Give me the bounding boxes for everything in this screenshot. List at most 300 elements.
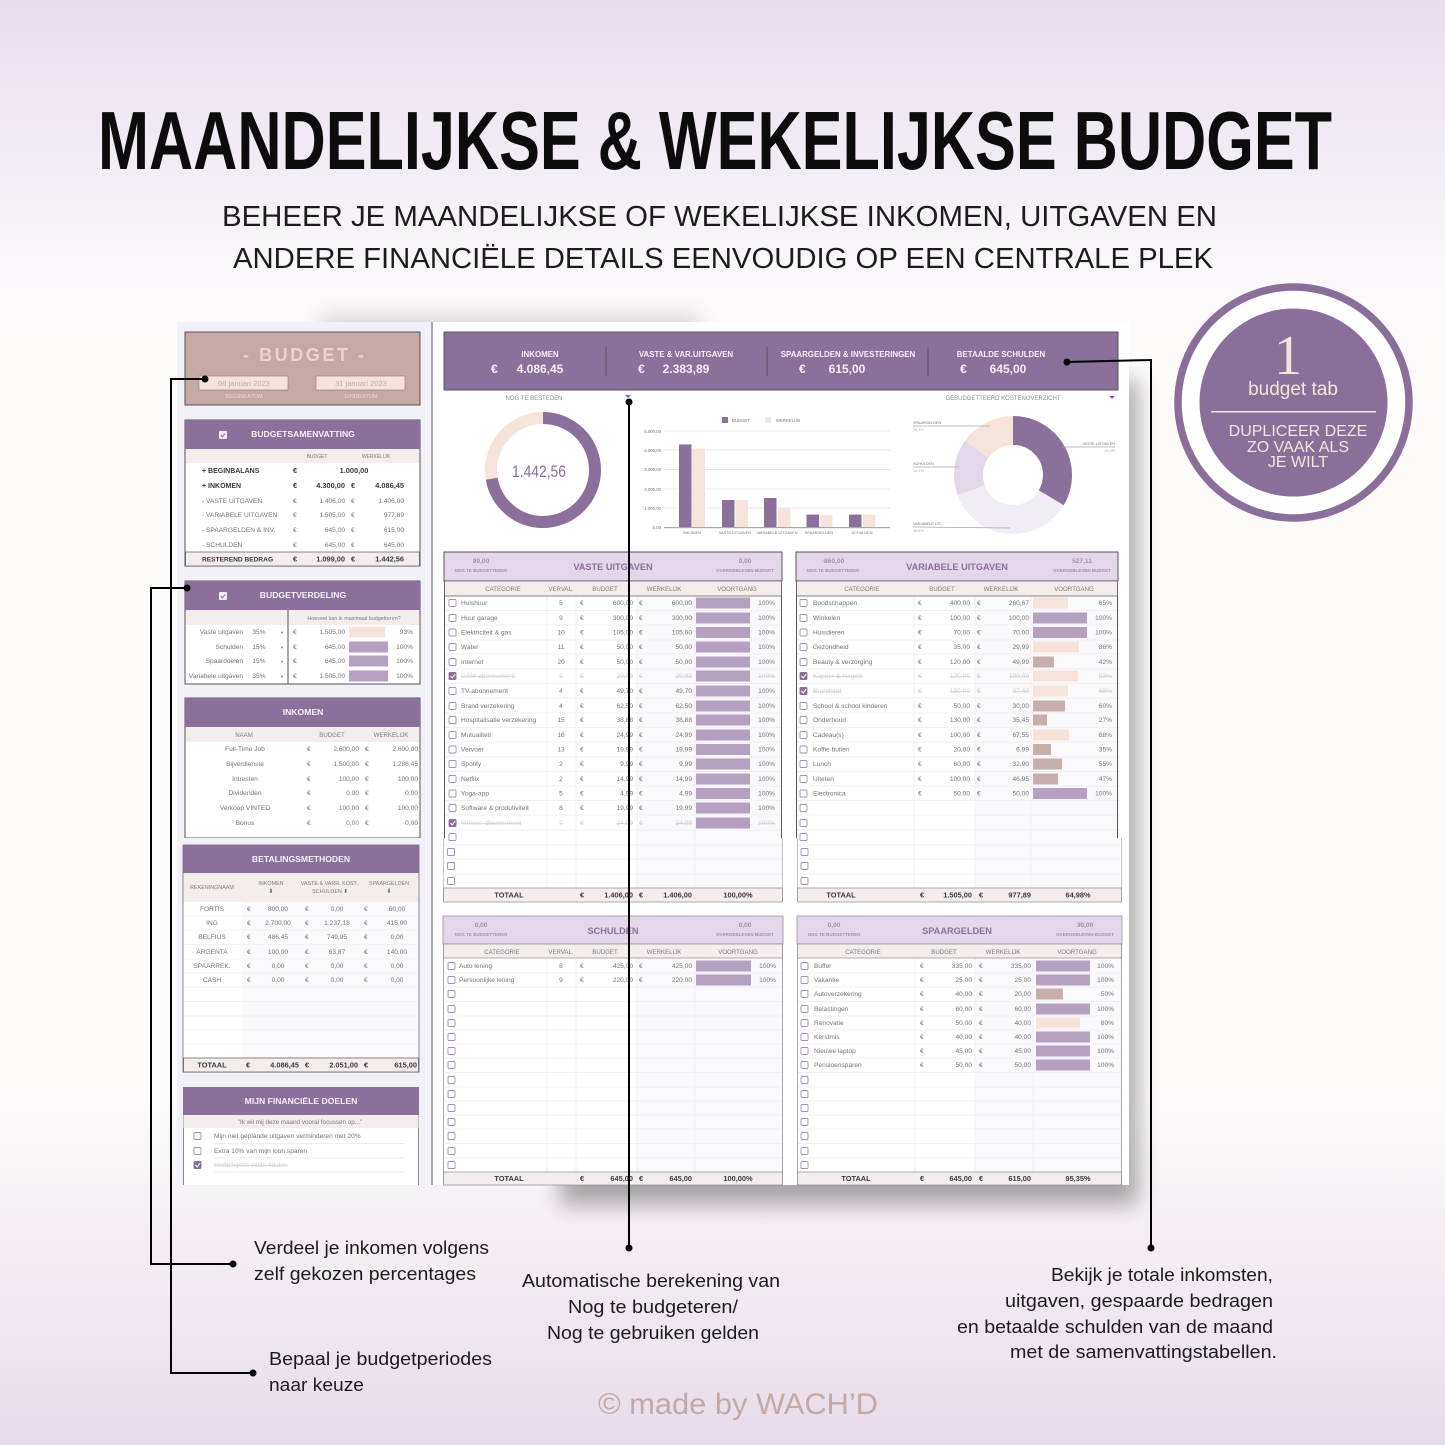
allocation rows: 35%: [252, 673, 266, 680]
savings rows: 100%: [1097, 1048, 1114, 1055]
fixed expenses rows: GSM-abonnement: [461, 673, 515, 680]
payment methods rows: €: [247, 977, 251, 984]
fixed expenses rows: 14,99: [616, 776, 633, 783]
payment methods rows: 60,00: [389, 906, 406, 913]
callout: automatic calculation text: Nog te budgeteren/: [568, 1296, 739, 1317]
variable expenses rows: 97,40: [1012, 688, 1029, 695]
fixed expenses rows: 100%: [758, 820, 775, 827]
payment methods rows: 63,87: [329, 949, 346, 956]
fixed expenses rows: 100%: [758, 630, 775, 636]
savings header: OVERGEBLEVEN BUDGET: [1056, 932, 1114, 937]
fixed expenses rows: 50,00: [616, 644, 633, 651]
summary rows: €: [351, 481, 355, 490]
allocation rows: ▼: [280, 674, 284, 679]
variable expenses rows: €: [918, 761, 922, 768]
variable expenses total row: 64,98%: [1065, 890, 1091, 900]
fixed expenses rows: 600,00: [672, 600, 692, 607]
fixed expenses rows: €: [580, 600, 584, 607]
variable expenses rows: €: [977, 776, 981, 783]
income rows: Dividenden: [228, 790, 262, 797]
debts header: 0,00: [475, 922, 488, 929]
fixed expenses rows: €: [580, 746, 584, 754]
fixed expenses rows: €: [639, 820, 643, 827]
savings total row: 645,00: [949, 1174, 972, 1183]
income rows: 100,00: [339, 776, 359, 783]
income rows: 100,00: [398, 805, 418, 812]
summary total row: €: [293, 554, 297, 564]
allocation rows: Variabele uitgaven: [189, 673, 243, 680]
savings rows: Autoverzekering: [814, 991, 862, 998]
payment methods rows: 0,00: [272, 977, 285, 984]
summary rows: €: [293, 481, 297, 490]
fixed expenses rows: €: [639, 717, 643, 724]
savings rows: 335,00: [1011, 963, 1031, 970]
income rows: €: [365, 820, 369, 827]
allocation rows: ▼: [280, 645, 284, 650]
variable expenses header: NOG TE BUDGETTEREN: [807, 568, 859, 573]
panel: budget allocation: [185, 581, 420, 684]
debts header: NOG TE BUDGETTEREN: [455, 932, 507, 937]
fixed expenses rows: Huur garage: [461, 615, 498, 622]
fixed expenses rows: 49,70: [675, 688, 692, 695]
debts rows: Persoonlijke lening: [459, 977, 515, 984]
variable expenses rows: 55%: [1099, 761, 1112, 768]
summary header: BUDGETSAMENVATTING: [251, 429, 355, 439]
fixed expenses header: NOG TE BUDGETTEREN: [455, 568, 507, 573]
subtitle: ANDERE FINANCIËLE DETAILS EENVOUDIG OP EEN CENTRALE PLEK: [233, 243, 1214, 275]
variable expenses rows: €: [977, 746, 981, 754]
payment methods total row: €: [246, 1060, 250, 1070]
y axis labels: 1.000,00: [644, 506, 662, 511]
fixed expenses rows: 38,88: [675, 717, 692, 724]
savings column headings: CATEGORIE: [845, 949, 881, 956]
fixed expenses rows: 600,00: [613, 600, 633, 607]
variable expenses rows: School & school kinderen: [813, 703, 888, 710]
payment methods rows: 0,00: [272, 963, 285, 970]
income rows: €: [307, 746, 311, 753]
variable expenses rows: €: [918, 659, 922, 666]
payment methods rows: €: [364, 963, 368, 970]
payment methods column headings: [184, 873, 418, 902]
fixed expenses rows: 100%: [758, 673, 775, 680]
savings rows: €: [920, 1062, 924, 1069]
spreadsheet screenshot: [177, 322, 1129, 1185]
callout: totals text: met de samenvattingstabellen.: [1010, 1341, 1277, 1362]
savings rows: €: [979, 1020, 983, 1027]
chart legend: [722, 417, 800, 423]
debts rows: 220,00: [672, 977, 692, 984]
savings total row: 615,00: [1008, 1174, 1031, 1183]
variable expenses total row: TOTAAL: [826, 890, 856, 900]
arrow: totals callout line: [1064, 358, 1154, 1252]
income rows: 0,00: [346, 820, 359, 827]
fixed expenses rows: €: [580, 790, 584, 798]
variable expenses rows: 100,00: [950, 615, 970, 622]
savings rows: Vakantie: [814, 977, 840, 984]
variable expenses rows: €: [918, 688, 922, 695]
debts rows: 220,00: [613, 977, 633, 984]
savings rows: 100%: [1097, 963, 1114, 970]
variable expenses rows: Onderhoud: [813, 717, 846, 724]
start date field: [199, 376, 288, 400]
savings rows: [801, 960, 1114, 1168]
fixed expenses rows: 4,99: [620, 790, 633, 798]
payment methods column headings: ⬇: [386, 888, 392, 895]
panel: payment methods: [183, 845, 419, 1072]
income rows: Verkoop VINTED: [220, 805, 270, 812]
allocation rows: €: [293, 658, 297, 665]
allocation header: BUDGETVERDELING: [260, 590, 347, 600]
y axis labels: 2.000,00: [644, 487, 662, 492]
income header: [185, 698, 420, 727]
fixed expenses rows: Brand verzekering: [461, 703, 515, 710]
fixed expenses rows: Yoga-app: [461, 790, 489, 798]
start date field: 06 januari 2023: [218, 379, 270, 388]
payment methods rows: €: [247, 920, 251, 927]
payment methods rows: €: [364, 977, 368, 984]
goals list: [194, 1132, 361, 1169]
savings column headings: [798, 944, 1122, 958]
fixed expenses header: [444, 552, 782, 581]
fixed expenses rows: 100%: [758, 659, 775, 666]
fixed expenses rows: 100%: [758, 600, 775, 607]
fixed expenses rows: 50,00: [675, 659, 692, 666]
savings rows: 45,00: [955, 1048, 972, 1055]
fixed expenses total row: TOTAAL: [494, 890, 524, 900]
debts rows: 8: [559, 963, 563, 970]
fixed expenses rows: 29,99: [616, 673, 633, 680]
fixed expenses rows: 300,00: [672, 615, 692, 622]
total: income: INKOMEN: [521, 350, 559, 359]
goals prompt: [184, 1115, 418, 1128]
variable expenses rows: Kapper & Nagels: [813, 673, 864, 680]
savings rows: 25,00: [1014, 977, 1031, 984]
variable expenses rows: 50,00: [1012, 790, 1029, 798]
fixed expenses rows: Hospitalisatie verzekering: [461, 717, 536, 724]
debts rows: €: [639, 977, 643, 984]
badge: one budget tab: ZO VAAK ALS: [1247, 439, 1349, 456]
fixed expenses rows: 2: [559, 761, 563, 768]
fixed expenses rows: €: [580, 673, 584, 680]
panel: savings table: [797, 916, 1122, 1185]
payment methods header: [183, 845, 419, 873]
savings column headings: WERKELIJK: [986, 949, 1020, 956]
debts rows: [448, 960, 776, 1168]
income rows: €: [307, 790, 311, 797]
goals prompt: "Ik wil mij deze maand vooral focussen op...": [238, 1119, 362, 1126]
debts column headings: VOORTGANG: [718, 949, 758, 956]
fixed expenses rows: 24,99: [616, 820, 633, 827]
fixed expenses rows: 100%: [758, 615, 775, 622]
variable expenses total row: [798, 888, 1122, 902]
fixed expenses rows: 100%: [758, 776, 775, 783]
variable expenses rows: 400,00: [950, 600, 970, 607]
x axis labels: SPAARGELDEN: [805, 531, 833, 535]
fixed expenses rows: Huishuur: [461, 600, 488, 607]
savings rows: Belastingen: [814, 1006, 849, 1013]
summary rows: €: [293, 512, 297, 519]
summary rows: - VASTE UITGAVEN: [202, 498, 262, 505]
x axis labels: VASTE UITGAVEN: [719, 531, 751, 535]
variable expenses rows: 6,99: [1016, 746, 1029, 754]
savings rows: 40,00: [955, 991, 972, 998]
fixed expenses column headings: VOORTGANG: [717, 586, 757, 593]
panel: fixed expenses table: [444, 552, 782, 902]
fixed expenses total row: [444, 888, 782, 902]
savings total row: 95,35%: [1065, 1174, 1091, 1183]
x axis labels: VARIABELE UITGAVEN: [756, 531, 798, 535]
debts rows: €: [580, 977, 584, 984]
callout: totals text: en betaalde schulden van de maand: [957, 1316, 1273, 1337]
fixed expenses rows: €: [639, 600, 643, 607]
panel: debts table: [443, 916, 783, 1185]
payment methods rows: 486,45: [268, 934, 288, 941]
payment methods rows: €: [305, 934, 309, 941]
variable expenses rows: €: [918, 615, 922, 622]
arrow: allocation callout line: [151, 584, 236, 1268]
fixed expenses rows: Software & produtiviteit: [461, 805, 529, 812]
variable expenses header: OVERGEBLEVEN BUDGET: [1053, 568, 1111, 573]
fixed expenses rows: €: [639, 630, 643, 636]
summary rows: 615,00: [384, 527, 404, 534]
allocation rows: 15%: [252, 658, 266, 665]
fixed expenses rows: 19,99: [616, 746, 633, 754]
savings rows: 60,00: [955, 1006, 972, 1013]
variable expenses rows: €: [918, 630, 922, 636]
debts column headings: VERVAL.: [548, 949, 574, 956]
variable expenses column headings: CATEGORIE: [844, 586, 880, 593]
fixed expenses rows: €: [639, 703, 643, 710]
payment methods rows: 1.237,18: [324, 920, 350, 927]
variable expenses rows: €: [977, 732, 981, 739]
debts header: [443, 916, 783, 944]
allocation rows: Vaste uitgaven: [200, 629, 243, 636]
credit: © made by WACH’D: [598, 1388, 878, 1421]
fixed expenses rows: €: [580, 717, 584, 724]
fixed expenses rows: 9: [559, 615, 563, 622]
payment methods rows: CASH: [203, 977, 221, 984]
total: fixed and variable expenses: VASTE & VAR.UITGAVEN: [639, 350, 733, 359]
fixed expenses total row: €: [580, 890, 584, 900]
payment methods rows: 415,00: [387, 920, 407, 927]
payment methods column headings: SCHULDEN ⬇: [312, 889, 348, 895]
fixed expenses rows: Internet: [461, 659, 484, 666]
variable expenses column headings: [796, 581, 1118, 596]
fixed expenses rows: €: [580, 703, 584, 710]
summary rows: 977,89: [384, 512, 404, 519]
fixed expenses rows: €: [580, 732, 584, 739]
variable expenses rows: 150,00: [950, 688, 970, 695]
income rows: €: [365, 761, 369, 768]
savings rows: 50,00: [1014, 1062, 1031, 1069]
savings header: 30,00: [1077, 922, 1094, 929]
variable expenses rows: Koffie buiten: [813, 746, 850, 754]
income rows: Bonus: [236, 820, 255, 827]
variable expenses rows: 65%: [1099, 600, 1112, 607]
savings rows: 100%: [1097, 1034, 1114, 1041]
fixed expenses column headings: WERKELIJK: [647, 586, 681, 593]
savings rows: Kerstmis: [814, 1034, 840, 1041]
payment methods rows: €: [305, 920, 309, 927]
y axis labels: 5.000,00: [644, 429, 662, 434]
allocation rows: 1.505,00: [319, 629, 345, 636]
variable expenses rows: 100,00: [950, 776, 970, 783]
payment methods column headings: REKENINGNAAM: [190, 885, 234, 891]
variable expenses rows: 46,95: [1012, 776, 1029, 783]
fixed expenses rows: 50,00: [616, 659, 633, 666]
debts rows: Auto lening: [459, 963, 492, 970]
callout: totals text: [957, 1264, 1277, 1362]
fixed expenses rows: 300,00: [613, 615, 633, 622]
fixed expenses rows: 3: [559, 673, 563, 680]
savings rows: Renovatie: [814, 1020, 844, 1027]
debts rows: 100%: [759, 963, 776, 970]
total: debts paid: [957, 350, 1046, 376]
savings header: SPAARGELDEN: [922, 926, 992, 936]
variable expenses rows: 100%: [1095, 630, 1112, 636]
panel: budget period: [185, 332, 420, 405]
payment methods rows: €: [247, 934, 251, 941]
fixed expenses rows: 100%: [758, 732, 775, 739]
variable expenses rows: €: [977, 630, 981, 636]
variable expenses rows: [800, 598, 1112, 884]
fixed expenses total row: 1.406,00: [604, 890, 633, 900]
donut chart: remaining to spend: 1.442,56: [512, 462, 566, 481]
savings rows: 100%: [1097, 977, 1114, 984]
pie labels: 15,4%: [913, 469, 924, 473]
savings rows: 45,00: [1014, 1048, 1031, 1055]
debts total row: €: [639, 1174, 643, 1183]
fixed expenses rows: 7: [559, 820, 563, 827]
variable expenses rows: 42%: [1099, 659, 1112, 666]
arrow: budget period callout line: [171, 376, 256, 1376]
debts total row: €: [580, 1174, 584, 1183]
variable expenses rows: 35,00: [953, 644, 970, 651]
allocation rows: 100%: [396, 673, 413, 680]
fixed expenses rows: €: [639, 644, 643, 651]
savings rows: 40,00: [1014, 1020, 1031, 1027]
summary column headings: [186, 449, 420, 463]
debts rows: 9: [559, 977, 563, 984]
income rows: 0,00: [405, 790, 418, 797]
panel: financial goals: [183, 1087, 419, 1185]
variable expenses rows: 67,55: [1012, 732, 1029, 739]
payment methods rows: €: [247, 963, 251, 970]
variable expenses rows: €: [977, 644, 981, 651]
variable expenses rows: €: [977, 659, 981, 666]
summary rows: €: [293, 542, 297, 549]
debts column headings: BUDGET: [592, 949, 618, 956]
panel: totals banner: [444, 332, 1118, 390]
income column headings: NAAM: [235, 732, 253, 739]
debts rows: €: [580, 963, 584, 970]
variable expenses rows: 60,00: [953, 761, 970, 768]
payment methods rows: €: [364, 920, 368, 927]
total: savings and investments: €: [799, 362, 806, 376]
savings rows: Buffer: [814, 963, 832, 970]
savings rows: 50,00: [955, 1062, 972, 1069]
income rows: Bijverdienste: [226, 761, 264, 768]
payment methods rows: €: [305, 977, 309, 984]
variable expenses rows: €: [918, 644, 922, 651]
savings total row: €: [979, 1174, 983, 1183]
summary total row: 1.099,00: [316, 554, 345, 564]
fixed expenses rows: €: [580, 659, 584, 666]
callout: period text: [269, 1348, 492, 1395]
savings rows: €: [979, 1062, 983, 1069]
fixed expenses rows: [448, 598, 775, 884]
variable expenses header: VARIABELE UITGAVEN: [906, 562, 1008, 572]
variable expenses rows: Electronica: [813, 790, 846, 798]
fixed expenses rows: 9,99: [679, 761, 692, 768]
savings rows: 50,00: [955, 1020, 972, 1027]
savings rows: €: [979, 977, 983, 984]
pie labels: VARIABELE UIT...: [913, 522, 944, 526]
savings header: 0,00: [828, 922, 841, 929]
savings rows: €: [920, 1006, 924, 1013]
y axis labels: 4.000,00: [644, 448, 662, 453]
callout: totals text: uitgaven, gespaarde bedragen: [1005, 1290, 1273, 1311]
fixed expenses rows: 19,99: [675, 805, 692, 812]
variable expenses rows: €: [918, 673, 922, 680]
allocation rows: 645,00: [325, 658, 345, 665]
savings rows: €: [920, 1034, 924, 1041]
income header: INKOMEN: [283, 707, 323, 717]
fixed expenses rows: 9,99: [620, 761, 633, 768]
fixed expenses rows: Fitness-abonnement: [461, 820, 521, 827]
fixed expenses rows: €: [580, 615, 584, 622]
summary rows: €: [293, 527, 297, 534]
allocation subheader: Hoeveel kan ik maximaal budgetteren?: [307, 616, 401, 622]
fixed expenses rows: Netflix: [461, 776, 480, 783]
summary rows: + BEGINBALANS: [202, 468, 260, 475]
payment methods rows: ARGENTA: [196, 949, 228, 956]
fixed expenses header: 99,00: [473, 558, 490, 565]
savings rows: 100%: [1097, 1006, 1114, 1013]
savings rows: €: [920, 1048, 924, 1055]
payment methods rows: 0,00: [331, 977, 344, 984]
variable expenses rows: 29,99: [1012, 644, 1029, 651]
fixed expenses rows: €: [580, 761, 584, 768]
fixed expenses total row: 1.406,00: [663, 890, 692, 900]
income rows: 0,00: [405, 820, 418, 827]
callout: allocation text: [254, 1237, 489, 1284]
payment methods rows: €: [247, 949, 251, 956]
fixed expenses total row: 100,00%: [723, 890, 753, 900]
debts total row: [444, 1172, 782, 1185]
allocation rows: ▼: [280, 659, 284, 664]
variable expenses column headings: BUDGET: [929, 586, 955, 593]
fixed expenses rows: 105,00: [613, 630, 633, 636]
savings rows: 60,00: [1014, 1006, 1031, 1013]
payment methods total row: [184, 1058, 418, 1072]
debts rows: 425,00: [672, 963, 692, 970]
fixed expenses rows: 19,99: [675, 746, 692, 754]
total: debts paid: €: [960, 362, 967, 376]
x axis labels: INKOMEN: [683, 531, 701, 535]
fixed expenses header: 0,00: [739, 558, 752, 565]
variable expenses header: -860,00: [822, 558, 845, 565]
summary rows: 4.300,00: [316, 481, 345, 490]
payment methods rows: €: [364, 906, 368, 913]
savings rows: €: [979, 963, 983, 970]
savings header: NOG TE BUDGETTEREN: [808, 932, 860, 937]
payment methods total row: 615,00: [394, 1060, 417, 1070]
fixed expenses rows: €: [580, 644, 584, 651]
payment methods rows: 0,00: [391, 963, 404, 970]
fixed expenses rows: 5: [559, 790, 563, 798]
fixed expenses rows: 105,00: [672, 630, 692, 636]
